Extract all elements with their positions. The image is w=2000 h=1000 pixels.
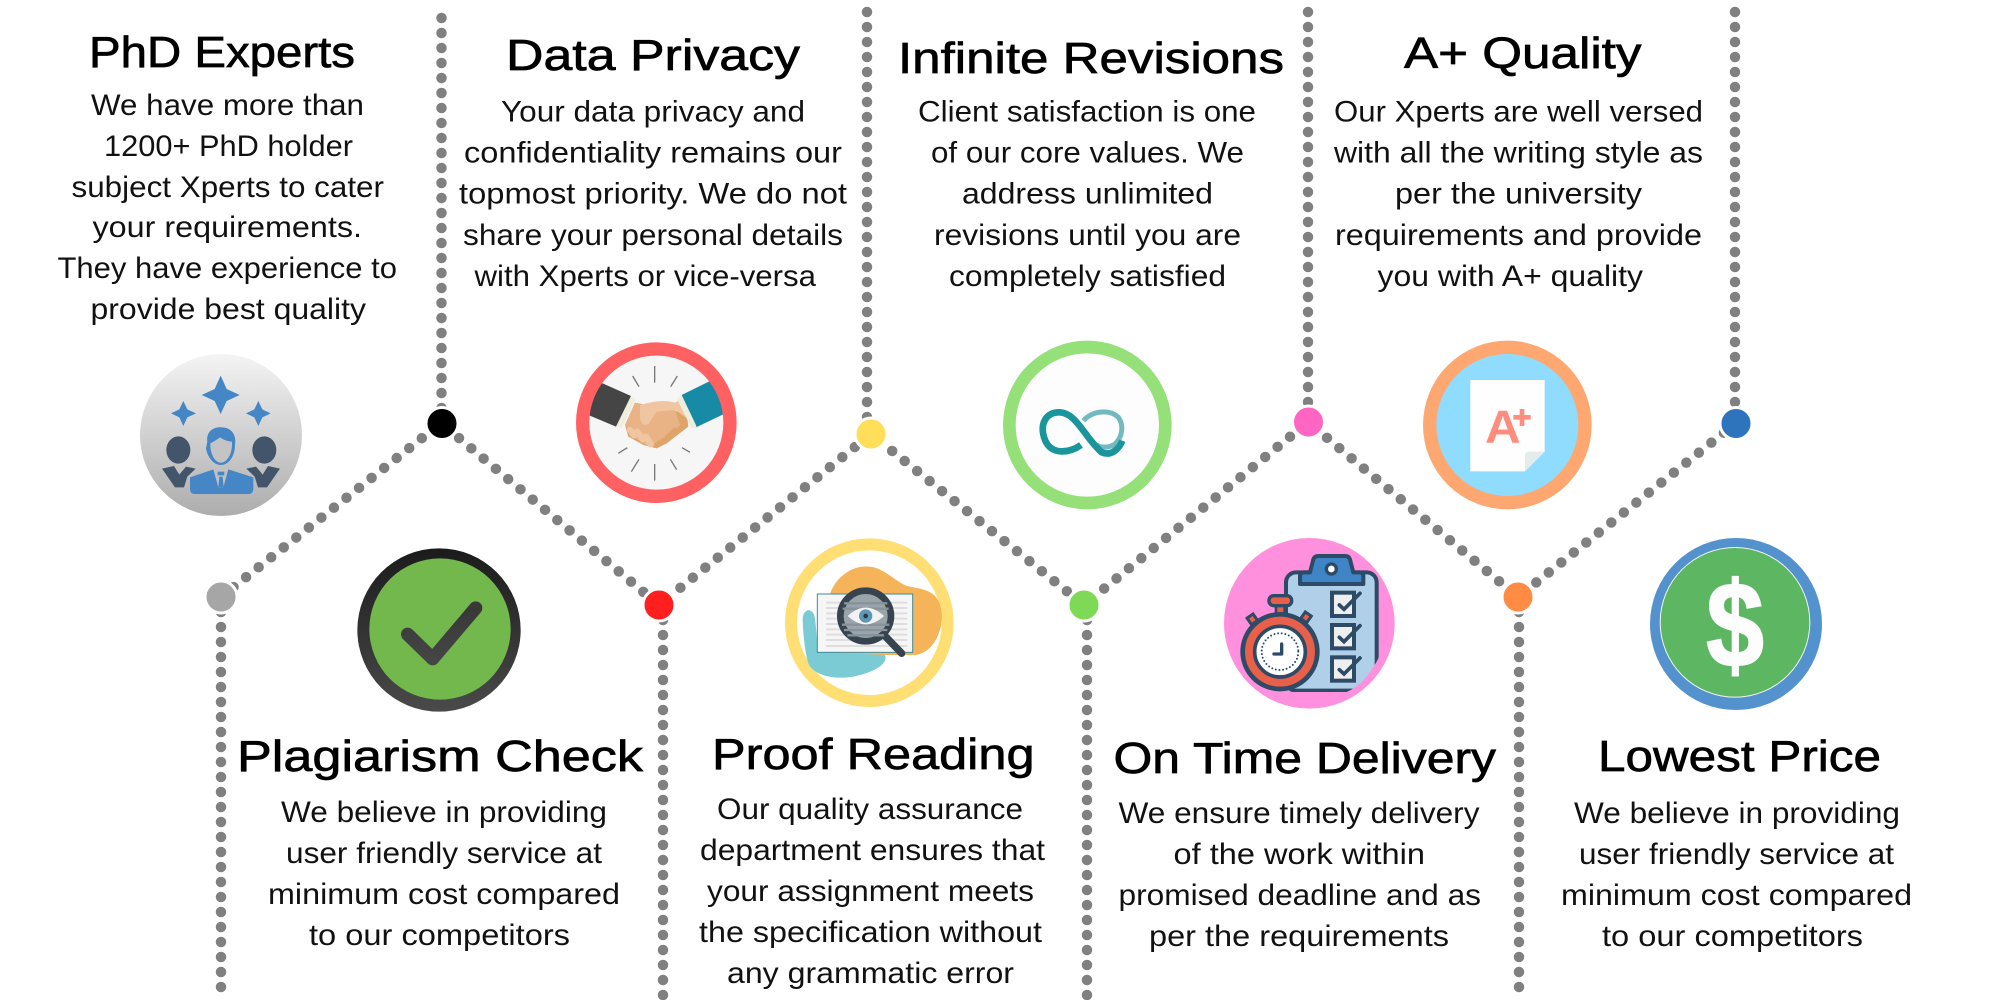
panel: Proof Reading (699, 544, 1045, 990)
body text: minimum cost compared (1561, 879, 1912, 912)
body text (268, 796, 620, 952)
body text: We have more than (91, 89, 364, 122)
body text: your assignment meets (707, 875, 1034, 908)
body text (1561, 797, 1912, 953)
body text: subject Xperts to cater (72, 171, 384, 204)
body text: They have experience to (58, 252, 397, 285)
body text (1118, 797, 1481, 953)
body text: per the university (1395, 178, 1642, 210)
body text: confidentiality remains our (464, 136, 842, 170)
body text (58, 89, 397, 326)
body text: share your personal details (463, 219, 843, 252)
body text: of the work within (1174, 838, 1425, 871)
heading: Plagiarism Check (237, 732, 644, 781)
body text: with Xperts or vice-versa (473, 260, 817, 293)
body text: user friendly service at (286, 837, 602, 870)
body text: provide best quality (90, 293, 366, 326)
body text: Our quality assurance (717, 793, 1023, 826)
icon: experts group (140, 354, 302, 516)
body text: topmost priority. We do not (459, 178, 847, 210)
icon: dollar coin: $ (1706, 557, 1764, 692)
body text: requirements and provide (1335, 219, 1702, 252)
icon: check mark (357, 548, 521, 712)
panel: PhD Experts (58, 28, 397, 516)
panel: Data Privacy (459, 31, 847, 496)
body text: with all the writing style as (1333, 136, 1703, 170)
body text (459, 96, 847, 293)
body text: any grammatic error (727, 957, 1014, 990)
panel: A+ Quality (1333, 29, 1703, 503)
heading: A+ Quality (1404, 29, 1642, 78)
body text: revisions until you are (934, 219, 1241, 252)
panel: Lowest Price (1561, 538, 1912, 953)
body text: to our competitors (1602, 920, 1863, 953)
heading: Infinite Revisions (898, 34, 1284, 83)
body text: the specification without (699, 916, 1042, 949)
heading: On Time Delivery (1114, 734, 1496, 783)
heading: PhD Experts (89, 28, 355, 77)
icon: magnifier over document (791, 544, 948, 701)
dotted connector: vertical lines and zigzag (221, 12, 1736, 1000)
body text: you with A+ quality (1378, 260, 1643, 293)
body text: user friendly service at (1579, 838, 1894, 871)
timeline nodes (205, 406, 1752, 621)
body text: per the requirements (1149, 920, 1449, 953)
body text (1333, 96, 1703, 293)
body text: We believe in providing (1574, 797, 1900, 830)
heading: Proof Reading (712, 730, 1034, 779)
panel: Plagiarism Check (237, 548, 644, 952)
panel: On Time Delivery (1114, 538, 1496, 953)
icon: infinity (1009, 347, 1165, 503)
body text: department ensures that (700, 834, 1045, 867)
body text: Client satisfaction is one (918, 96, 1256, 128)
icon: A+ document (1430, 347, 1585, 503)
body text: We believe in providing (281, 796, 607, 829)
panel: Infinite Revisions (898, 34, 1284, 503)
body text (699, 793, 1045, 990)
icon: dollar coin (1650, 538, 1822, 710)
body text: 1200+ PhD holder (104, 130, 353, 163)
body text: We ensure timely delivery (1118, 797, 1480, 830)
body text: minimum cost compared (268, 878, 620, 911)
body text: promised deadline and as (1118, 879, 1481, 912)
icon: handshake (583, 349, 730, 496)
body text: Your data privacy and (501, 96, 805, 128)
body text (918, 96, 1256, 293)
heading: Data Privacy (506, 31, 800, 80)
body text: Our Xperts are well versed (1334, 96, 1703, 128)
body text: of our core values. We (931, 136, 1244, 170)
body text: your requirements. (92, 211, 362, 244)
body text: completely satisfied (949, 260, 1226, 293)
body text: address unlimited (962, 178, 1213, 210)
heading: Lowest Price (1598, 732, 1881, 781)
icon: A+ document: A (1485, 400, 1521, 452)
body text: to our competitors (309, 919, 570, 952)
icon: stopwatch and checklist (1224, 538, 1395, 709)
